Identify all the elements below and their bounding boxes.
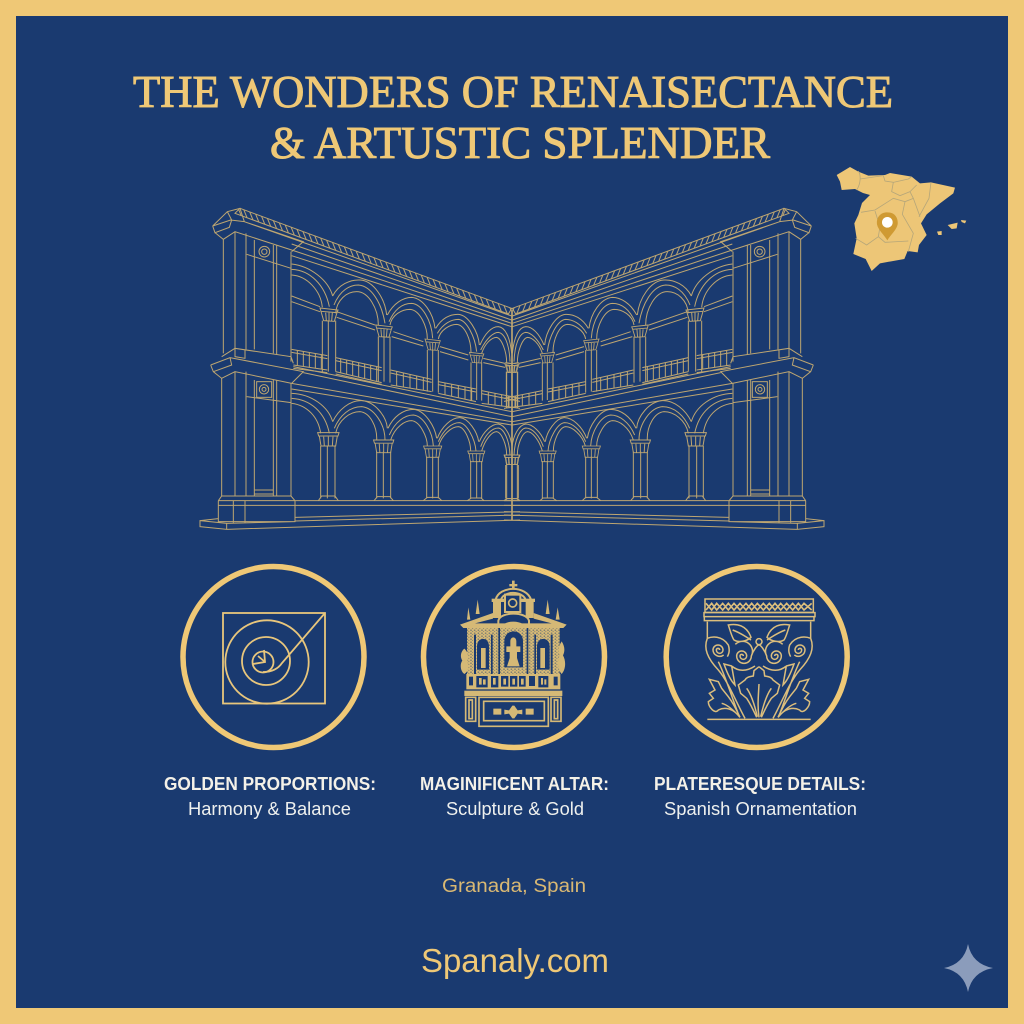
caption: magnificent altar [420, 774, 609, 819]
illustration: arcaded cloister facade [200, 208, 824, 529]
caption: magnificent altar: Sculpture & Gold [446, 799, 584, 819]
icon: four-point star [944, 944, 993, 992]
caption: magnificent altar: MAGINIFICENT ALTAR: [420, 774, 609, 794]
icon: magnificent altar [424, 566, 604, 748]
caption: plateresque details: Spanish Ornamentation [664, 799, 857, 819]
icon: golden proportions [183, 566, 364, 748]
title: THE WONDERS OF RENAISECTANCE [133, 67, 893, 117]
website: Spanaly.com [421, 942, 609, 979]
icon: plateresque details [666, 566, 847, 748]
caption: golden proportions: GOLDEN PROPORTIONS: [164, 774, 376, 794]
location label: Granada, Spain [442, 876, 586, 897]
map of Spain with location pin [837, 167, 966, 271]
caption: golden proportions: Harmony & Balance [188, 799, 351, 819]
caption: golden proportions [164, 774, 376, 819]
title [133, 67, 893, 168]
title: & ARTUSTIC SPLENDER [270, 118, 770, 168]
caption: plateresque details [654, 774, 866, 819]
caption: plateresque details: PLATERESQUE DETAILS: [654, 774, 866, 794]
